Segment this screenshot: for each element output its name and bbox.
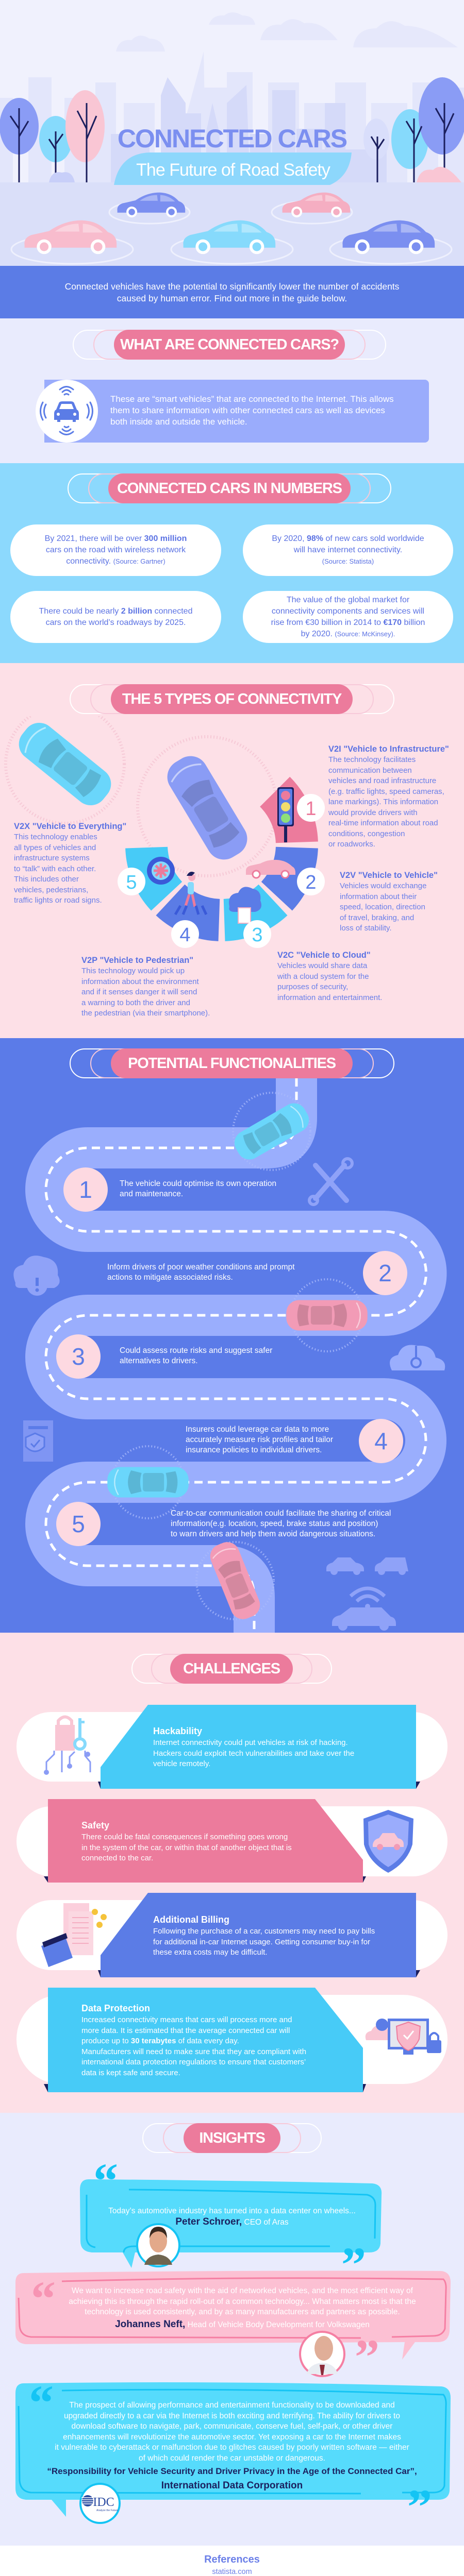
- section: insights: [0, 2113, 464, 2546]
- stat card: 98%: By 2020, 98% of new cars sold worldwide: [272, 534, 424, 543]
- bubble 2: [15, 2271, 451, 2384]
- references: References: [204, 2554, 260, 2565]
- challenge text: additional billing: for additional in-car Internet usage. Getting consumer buy-in for: [153, 1937, 370, 1946]
- bubble 3: [15, 2375, 451, 2534]
- quote 3: “Responsibility for Vehicle Security and Driver Privacy in the Age of the Connected Car”,: [47, 2466, 417, 2476]
- challenge text: hackability: [153, 1726, 354, 1768]
- references: statista.com: [212, 2568, 252, 2576]
- number badges: [118, 794, 325, 948]
- subtitle banner: The Future of Road Safety: [136, 160, 330, 180]
- stat card: 98%: (Source: Statista): [322, 557, 374, 565]
- functionality 1 text: and maintenance.: [120, 1190, 183, 1198]
- definition text: These are “smart vehicles” that are connected to the Internet. This allows: [110, 394, 394, 404]
- number badges: 3: [252, 924, 263, 946]
- stat card: 300 million: [10, 524, 221, 576]
- quote 3: International Data Corporation: [161, 2480, 303, 2491]
- heading: in numbers: [68, 473, 391, 503]
- clouds: [116, 12, 458, 52]
- text: V2P: the pedestrian (via their smartphone).: [81, 1009, 210, 1018]
- text: V2I: conditions, congestion: [328, 829, 405, 838]
- road: [0, 182, 464, 266]
- text: V2V: V2V "Vehicle to Vehicle": [340, 871, 438, 880]
- functionality 1 text: [120, 1179, 276, 1198]
- step badges: 1: [79, 1176, 92, 1203]
- heading: potential functionalities: [70, 1048, 394, 1078]
- challenge text: hackability: Internet connectivity could put vehicles at risk of hacking.: [153, 1738, 348, 1747]
- functionality 4 text: [186, 1425, 333, 1454]
- quote 3: enhancements will revolutionize the automotive sector. Yet exposing a car to the Internet makes: [63, 2433, 401, 2441]
- challenge text: data protection: produce up to 30 terabytes of data every day.: [81, 2037, 239, 2045]
- heading: potential functionalities: POTENTIAL FUNCTIONALITIES: [128, 1055, 336, 1072]
- icon: traffic light: [277, 787, 294, 842]
- stat card: 300 million: By 2021, there will be over 300 million: [45, 534, 187, 543]
- functionality 2 text: [107, 1263, 295, 1282]
- stat card: market value: The value of the global market for: [287, 596, 409, 604]
- stat card: market value: connectivity components and services will: [272, 607, 424, 615]
- quote 1: [108, 2207, 356, 2227]
- text: V2I: real-time information about road: [328, 819, 438, 827]
- text: V2P: information about the environment: [81, 977, 199, 986]
- car: V2X cyan: [12, 716, 118, 812]
- challenge text: additional billing: Following the purchase of a car, customers may need to pay bills: [153, 1927, 375, 1936]
- quote 3: it vulnerable to cyberattack or malfunction due to glitches caused by poorly written software — either: [55, 2443, 409, 2452]
- definition box: [36, 380, 429, 443]
- header illustration: [0, 0, 464, 266]
- icon: cloud: [229, 887, 261, 923]
- skyline: [0, 52, 464, 185]
- quote 2: Johannes Neft, Head of Vehicle Body Development for Volkswagen: [115, 2318, 370, 2330]
- text: V2C: information and entertainment.: [277, 993, 382, 1002]
- quote 3: [47, 2401, 417, 2491]
- intro band: [0, 266, 464, 318]
- challenge text: hackability: vehicle remotely.: [153, 1759, 210, 1768]
- challenge text: safety: in the system of the car, or within that of another object that is: [81, 1843, 292, 1852]
- text: V2X: [14, 822, 126, 905]
- step badges: 2: [378, 1260, 392, 1286]
- text: V2P: [81, 956, 210, 1018]
- icon: tyre: [147, 857, 175, 885]
- trees left: [0, 90, 105, 182]
- number badges: 4: [179, 924, 191, 946]
- intro band: Connected vehicles have the potential to significantly lower the number of accidents: [65, 281, 399, 292]
- cars on road: [11, 201, 452, 264]
- challenge text: data protection: Manufacturers will need to make sure that they are compliant with: [81, 2047, 306, 2056]
- stat card: 2 billion: [10, 591, 221, 643]
- quote 3: download software to navigate, park, communicate, conserve fuel, self-park, or other driver: [72, 2422, 392, 2431]
- functionality 3 text: Could assess route risks and suggest safer: [120, 1346, 272, 1355]
- text: V2X: This technology enables: [14, 833, 97, 841]
- text: V2I: (e.g. traffic lights, speed cameras,: [328, 787, 444, 795]
- challenge text: data protection: Increased connectivity means that cars will process more and: [81, 2015, 292, 2024]
- road map: [13, 1078, 446, 1633]
- text: V2X: This includes other: [14, 875, 79, 884]
- subtitle banner: [114, 152, 352, 185]
- quote 1: Today’s automotive industry has turned into a data center on wheels...: [108, 2207, 356, 2215]
- text: V2C: [277, 951, 382, 1002]
- bubble 1: [80, 2153, 382, 2292]
- icon: lock and key: [44, 1717, 90, 1775]
- quote 2: [69, 2286, 416, 2330]
- functionality 3 text: [120, 1346, 272, 1365]
- icon: insurance document: [23, 1420, 53, 1462]
- heading: 5 types: THE 5 TYPES OF CONNECTIVITY: [122, 691, 341, 707]
- section: 5 types of connectivity: [0, 663, 464, 1038]
- text: V2P: and if it senses danger it will send: [81, 988, 197, 996]
- challenge text: additional billing: Additional Billing: [153, 1914, 229, 1925]
- heading: challenges: [131, 1654, 332, 1684]
- challenge text: data protection: Data Protection: [81, 2003, 150, 2013]
- definition text: [110, 394, 394, 427]
- cars on road: [230, 1099, 313, 1164]
- functionality 5 text: Car-to-car communication could facilitate the sharing of critical: [171, 1509, 391, 1518]
- connectivity diagram: [4, 716, 325, 948]
- text: V2I: vehicles and road infrastructure: [328, 776, 436, 785]
- text: V2I: V2I "Vehicle to Infrastructure": [328, 744, 449, 754]
- challenge text: safety: Safety: [81, 1820, 109, 1831]
- challenge text: data protection: more data. It is estimated that the average connected car will: [81, 2026, 290, 2035]
- car: blue centre: [161, 750, 254, 866]
- text: V2X: V2X "Vehicle to Everything": [14, 822, 126, 831]
- signal rings: [6, 705, 277, 876]
- heading: what are connected cars: WHAT ARE CONNECTED CARS?: [120, 336, 339, 353]
- text: V2P: V2P "Vehicle to Pedestrian": [81, 956, 193, 965]
- text: V2I: lane markings). This information: [328, 798, 438, 806]
- challenge text: hackability: Hackability: [153, 1726, 202, 1736]
- heading: insights: INSIGHTS: [199, 2130, 265, 2146]
- icon: pedestrian: [175, 872, 206, 914]
- stat card: 98%: will have internet connectivity.: [294, 546, 402, 554]
- text: V2X: vehicles, pedestrians,: [14, 885, 88, 894]
- ribbon: data protection: [48, 1988, 363, 2092]
- text: V2C: Vehicles would share data: [277, 961, 367, 970]
- text: V2I: The technology facilitates: [328, 755, 416, 764]
- number badges: 2: [305, 872, 317, 893]
- stat card: 300 million: cars on the road with wireless network: [46, 546, 186, 554]
- challenge text: data protection: international data protection regulations to ensure that customers’: [81, 2058, 306, 2066]
- functionality 4 text: insurance policies to individual drivers.: [186, 1446, 322, 1454]
- challenge text: data protection: data is kept safe and secure.: [81, 2068, 180, 2077]
- challenge text: additional billing: [153, 1914, 375, 1957]
- challenge text: data protection: [81, 2003, 306, 2077]
- icon: cloud key: [390, 1345, 445, 1370]
- heading: challenges: CHALLENGES: [183, 1660, 280, 1677]
- stat card: market value: [243, 591, 453, 643]
- section: what are connected cars: [0, 318, 464, 463]
- stat card: 2 billion: There could be nearly 2 billion connected: [39, 607, 192, 615]
- icon: cloud warning: [13, 1256, 60, 1296]
- text: V2V: Vehicles would exchange: [340, 882, 426, 890]
- text: V2C: purposes of security,: [277, 982, 348, 991]
- quote 3: The prospect of allowing performance and entertainment functionality to be downloaded and: [69, 2401, 395, 2410]
- text: V2V: loss of stability.: [340, 924, 392, 933]
- stat card: 2 billion: cars on the world’s roadways by 2025.: [46, 618, 186, 626]
- section: connected cars in numbers: [0, 463, 464, 663]
- icon: cars network: [326, 1557, 408, 1631]
- challenge text: hackability: Hackers could exploit tech vulnerabilities and take over the: [153, 1749, 354, 1758]
- references: [204, 2554, 260, 2576]
- text: V2V: [340, 871, 438, 933]
- icon: small car: [246, 860, 295, 878]
- text: V2C: V2C "Vehicle to Cloud": [277, 951, 371, 960]
- text: V2I: [328, 744, 449, 849]
- step badges: 4: [374, 1428, 388, 1454]
- functionality 3 text: alternatives to drivers.: [120, 1357, 198, 1365]
- bubble 3: “: [29, 2375, 54, 2430]
- quote 3: of which could render the car unstable or dangerous.: [139, 2453, 325, 2463]
- heading: in numbers: CONNECTED CARS IN NUMBERS: [117, 480, 342, 497]
- ribbon: additional billing: [101, 1893, 416, 1977]
- quote 1: Peter Schroer, CEO of Aras: [175, 2216, 289, 2227]
- functionality 2 text: Inform drivers of poor weather conditions and prompt: [107, 1263, 295, 1272]
- bubble 1: ”: [341, 2237, 366, 2292]
- text: V2V: speed, location, direction: [340, 903, 425, 911]
- stat card: 300 million: connectivity. (Source: Gartner): [66, 557, 165, 566]
- step badges: 5: [72, 1511, 85, 1537]
- logo: IDC: IDC: [93, 2496, 114, 2509]
- text: V2I: or roadworks.: [328, 840, 375, 849]
- challenge text: safety: There could be fatal consequences if something goes wrong: [81, 1833, 288, 1841]
- intro band: caused by human error. Find out more in the guide below.: [117, 293, 347, 303]
- step badges: [56, 1167, 407, 1546]
- quote 2: We want to increase road safety with the aid of networked vehicles, and the most efficient way of: [72, 2286, 413, 2295]
- logo: IDC: [80, 2484, 120, 2523]
- text: V2X: to “talk” with each other.: [14, 865, 96, 873]
- challenge text: safety: connected to the car.: [81, 1854, 153, 1862]
- icon: bills and card: [41, 1903, 107, 1967]
- ribbon: safety: [48, 1799, 363, 1883]
- quote 2: achieving this is through the rapid roll-out of a common technology... What matters most is that the: [69, 2297, 416, 2306]
- signal rings: [112, 1093, 363, 1619]
- stat card: 98%: [243, 524, 453, 576]
- heading: what are connected cars: [73, 330, 386, 360]
- challenge cards graphics: [16, 1705, 448, 2092]
- icon: tools: [309, 1159, 352, 1205]
- text: V2I: communication between: [328, 766, 412, 775]
- bubble 2: ”: [355, 2329, 379, 2384]
- challenge text: safety: [81, 1820, 292, 1862]
- step badges: 3: [72, 1343, 85, 1370]
- ribbon: hackability: [101, 1705, 416, 1789]
- photo: Johannes Neft: [300, 2332, 344, 2376]
- text: V2C: with a cloud system for the: [277, 972, 369, 981]
- functionality 5 text: information(e.g. location, speed, brake status and position): [171, 1519, 378, 1528]
- text: V2P: This technology would pick up: [81, 967, 185, 975]
- number badges: 5: [126, 872, 137, 893]
- text: V2X: traffic lights or road signs.: [14, 896, 102, 905]
- title: CONNECTED CARS: [118, 124, 347, 153]
- functionality 5 text: to warn drivers and help them avoid dangerous situations.: [171, 1530, 375, 1538]
- functionality 1 text: The vehicle could optimise its own operation: [120, 1179, 276, 1188]
- functionality 4 text: accurately measure risk profiles and tailor: [186, 1435, 333, 1444]
- number badges: 1: [305, 798, 317, 820]
- text: V2V: of travel, braking, and: [340, 913, 414, 922]
- logo: IDC: Analyze the Future: [96, 2509, 118, 2512]
- text: V2P: a warning to both the driver and: [81, 998, 190, 1007]
- text: V2X: all types of vehicles and: [14, 843, 96, 852]
- trees right: [363, 77, 464, 182]
- text: V2X: infrastructure systems: [14, 854, 90, 862]
- stat card: market value: rise from €30 billion in 2014 to €170 billion: [271, 618, 425, 626]
- definition text: both inside and outside the vehicle.: [110, 417, 247, 427]
- icon: shield car: [363, 1810, 413, 1873]
- photo: Peter Schroer: [137, 2224, 179, 2266]
- section: challenges: [0, 1633, 464, 2113]
- heading: insights: [142, 2123, 322, 2153]
- quote bubbles graphics: [15, 2164, 451, 2524]
- text: V2V: information about their: [340, 892, 417, 901]
- functionality 2 text: actions to mitigate associated risks.: [107, 1273, 233, 1282]
- challenge text: additional billing: these extra costs may be difficult.: [153, 1948, 267, 1957]
- icon: data protection monitor: [366, 2019, 441, 2055]
- bubble 2: “: [31, 2271, 56, 2326]
- text: V2I: would provide drivers with: [328, 808, 418, 817]
- section: potential functionalities: [0, 1038, 464, 1633]
- heading: 5 types: [70, 684, 394, 714]
- functionality 5 text: [171, 1509, 391, 1538]
- icon: connected car: [36, 380, 98, 443]
- definition text: them to share information with other connected cars as well as devices: [110, 405, 385, 415]
- quote 3: upgraded directly to a car via the Internet is both exciting and terrifying. The ability for drivers to: [64, 2411, 400, 2420]
- functionality 4 text: Insurers could leverage car data to more: [186, 1425, 329, 1434]
- ring segments: [125, 777, 318, 941]
- stat card: market value: by 2020. (Source: McKinsey).: [301, 630, 395, 638]
- quote 2: technology is used consistently, and by as many manufacturers and partners as possible.: [85, 2308, 400, 2316]
